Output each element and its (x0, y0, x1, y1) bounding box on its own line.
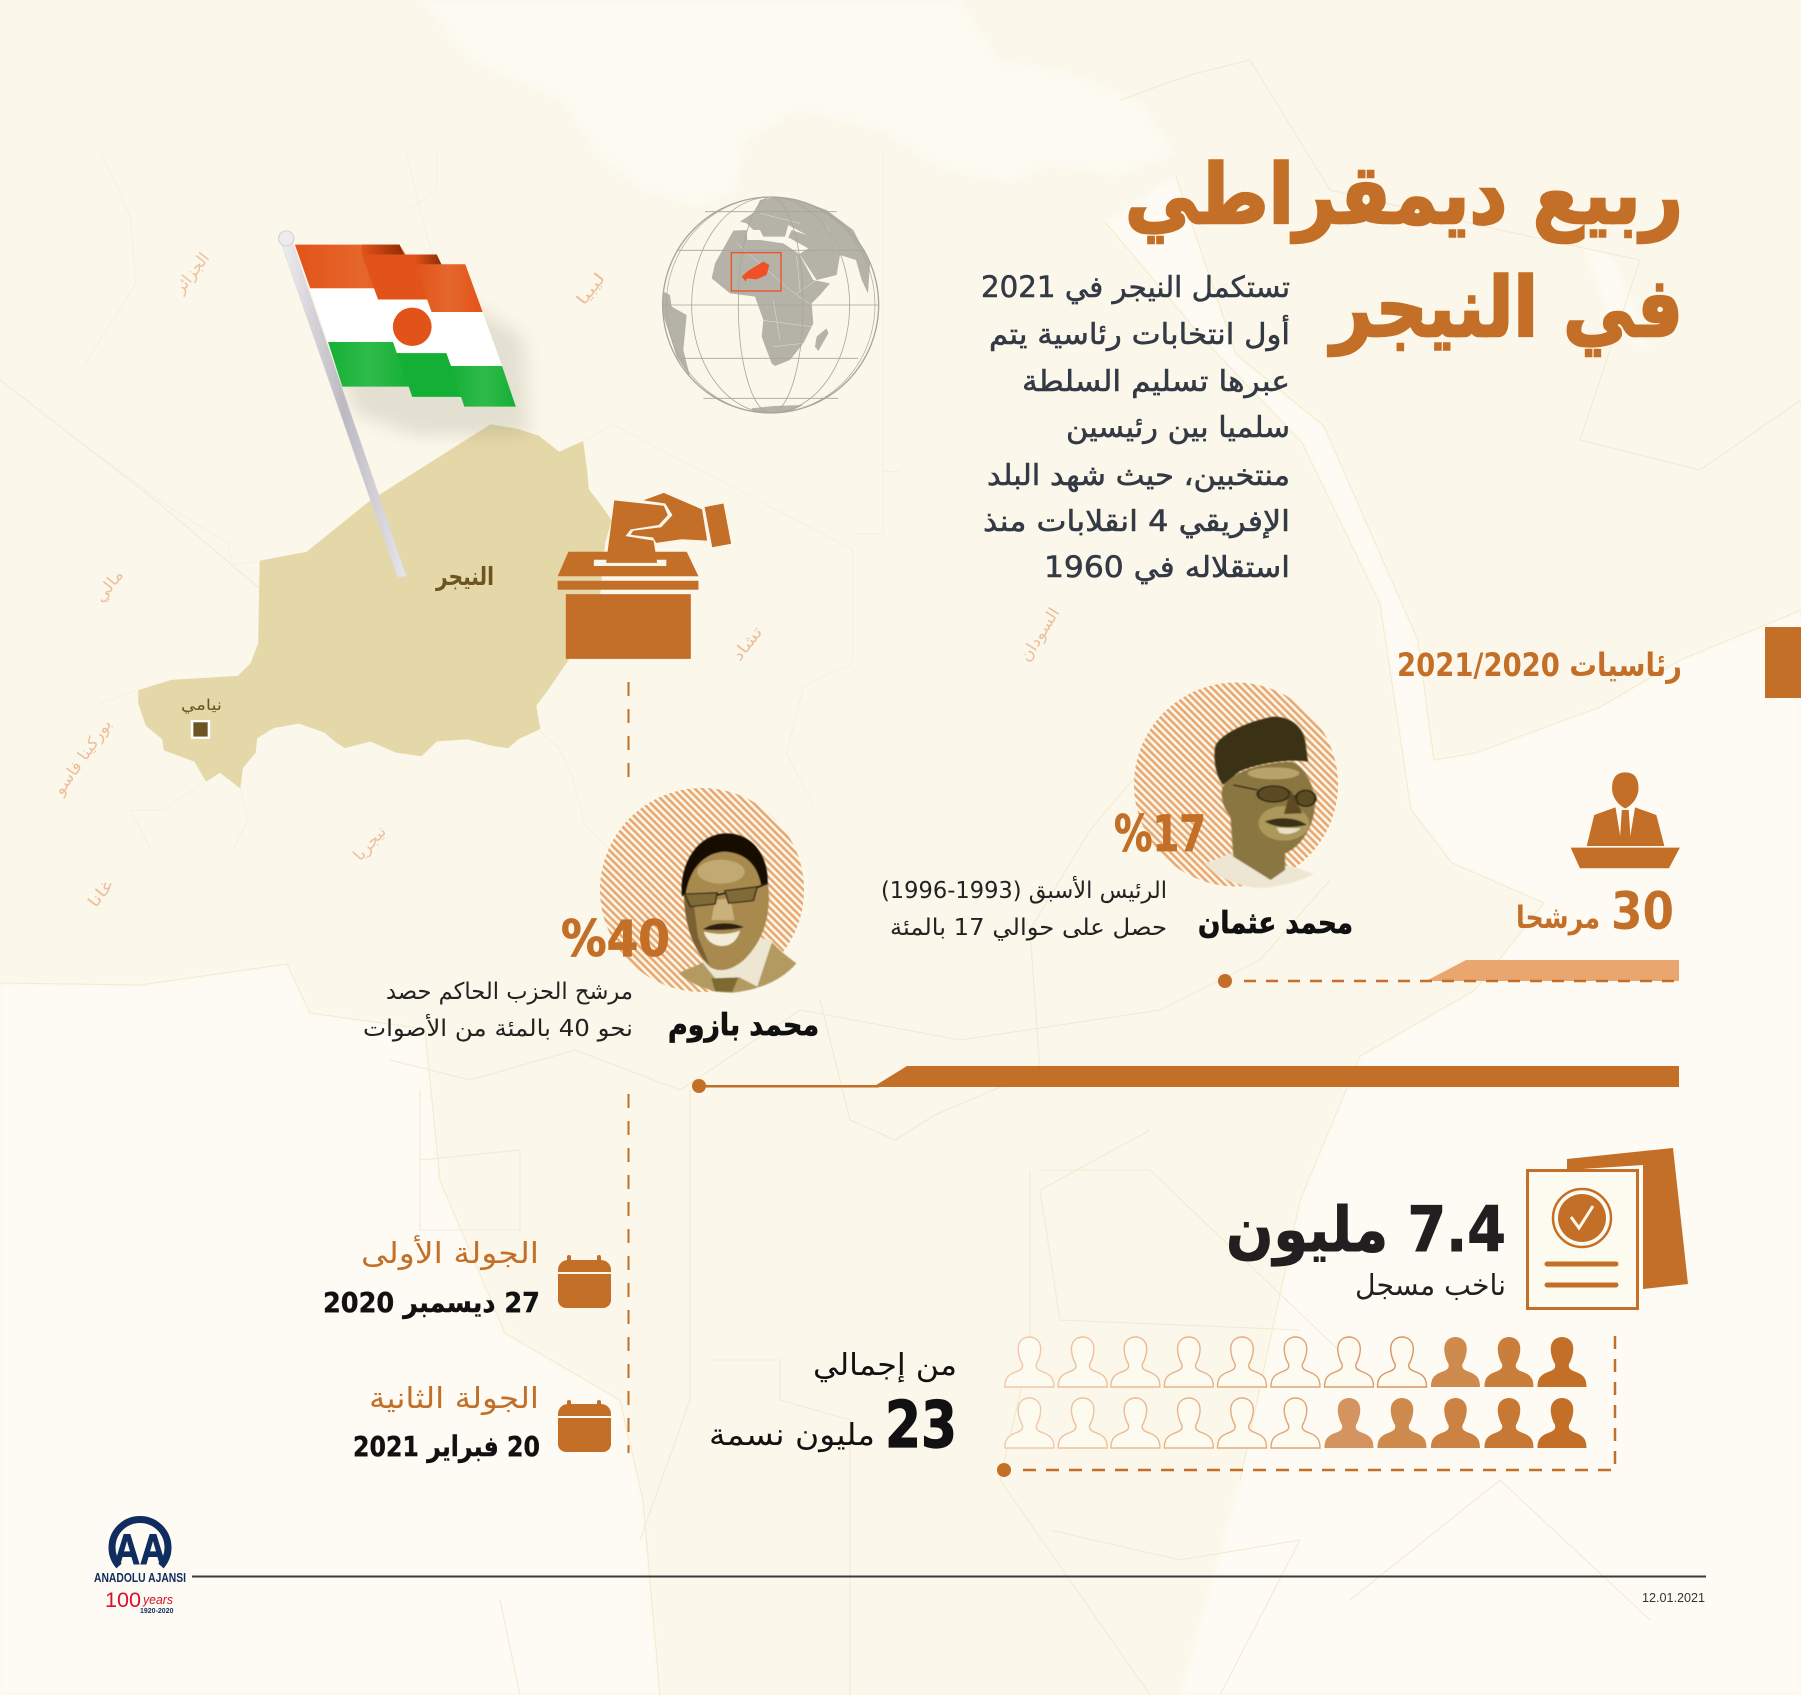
map label: Burkina Faso: بوركينا فاسو (49, 715, 116, 800)
description (363, 979, 633, 1042)
stat: of 23 million population: مليون نسمة (709, 1418, 875, 1453)
side tab (1765, 627, 1801, 698)
intro paragraph: الإفريقي 4 انقلابات منذ (983, 504, 1290, 539)
logo: Anadolu Agency: ANADOLU AJANSI (94, 1570, 186, 1585)
candidate: Bazoum (363, 788, 819, 1043)
title: في النيجر (1327, 261, 1683, 356)
people pictogram (1005, 1337, 1586, 1448)
intro paragraph: تستكمل النيجر في 2021 (981, 270, 1290, 305)
icon: calendar (558, 1255, 611, 1308)
timeline dashes (628, 682, 630, 1453)
stat: 30 candidates: 30 (1611, 882, 1674, 942)
round two (353, 1381, 611, 1463)
intro paragraph (981, 270, 1290, 585)
capital marker: Niamey (191, 720, 210, 739)
label: الجولة الثانية (369, 1381, 539, 1415)
name: محمد بازوم (668, 1008, 819, 1043)
bar: Ousmane share (1218, 960, 1679, 988)
portrait: Mohamed Bazoum (679, 833, 796, 993)
intro paragraph: استقلاله في 1960 (1044, 550, 1290, 585)
label: الجولة الأولى (361, 1234, 539, 1270)
icon: calendar (558, 1400, 611, 1452)
logo: Anadolu Agency (94, 1519, 186, 1615)
intro paragraph: أول انتخابات رئاسية يتم (989, 314, 1290, 352)
stat: 7.4 million registered voters: 7.4 مليون (1226, 1193, 1506, 1266)
logo: Anadolu Agency: AA (114, 1526, 166, 1574)
portrait: Mohamed Ousmane (1205, 717, 1316, 888)
stat: of 23 million population (709, 1348, 957, 1463)
date stamp: 12.01.2021 (1642, 1590, 1705, 1605)
footer rule (192, 1576, 1706, 1578)
percentage 40: %40 (561, 910, 670, 968)
logo: Anadolu Agency: 100 (105, 1589, 141, 1612)
stat: 7.4 million registered voters: ناخب مسجل (1355, 1268, 1506, 1302)
description: الرئيس الأسبق (1993-1996) (881, 876, 1167, 904)
description (881, 876, 1167, 941)
map label: Chad: تشاد (728, 623, 766, 664)
map label: Algeria: الجزائر (169, 249, 214, 298)
stat: 30 candidates (1516, 882, 1674, 942)
Niger map (138, 424, 612, 788)
stat: 30 candidates: مرشحا (1516, 900, 1600, 936)
map label: Sudan: السودان (1015, 604, 1064, 666)
bracket line (997, 1330, 1615, 1477)
icon: voter document (1528, 1148, 1688, 1308)
icon: globe (662, 197, 879, 413)
date: 20 فبراير 2021 (353, 1430, 540, 1463)
logo: Anadolu Agency: 1920-2020 (140, 1608, 174, 1615)
title (1125, 148, 1683, 356)
description: مرشح الحزب الحاكم حصد (386, 979, 633, 1005)
map label: Ghana: غانا (84, 876, 117, 911)
logo: Anadolu Agency: years (142, 1592, 173, 1607)
title: ربيع ديمقراطي (1125, 148, 1683, 243)
stat: 7.4 million registered voters (1226, 1193, 1506, 1302)
section heading: presidential 2020/2021: رئاسيات 2021/2020 (1397, 646, 1682, 684)
round one (323, 1234, 611, 1319)
intro paragraph: منتخبين، حيث شهد البلد (987, 458, 1290, 492)
label: Niamey: نيامي (181, 696, 222, 715)
icon: speaker at podium (1571, 772, 1680, 868)
map label: Mali: مالي (90, 566, 128, 606)
stat: of 23 million population: 23 (885, 1389, 957, 1463)
label: Niger: النيجر (434, 562, 494, 592)
map label: Nigeria: نيجريا (349, 822, 391, 865)
intro paragraph: عبرها تسليم السلطة (1022, 364, 1290, 399)
date: 27 ديسمبر 2020 (323, 1286, 540, 1319)
description: نحو 40 بالمئة من الأصوات (363, 1014, 633, 1042)
candidate: Ousmane (881, 682, 1353, 941)
icon: ballot box (558, 493, 731, 659)
description: حصل على حوالي 17 بالمئة (890, 915, 1167, 941)
stat: of 23 million population: من إجمالي (813, 1348, 957, 1383)
intro paragraph: سلميا بين رئيسين (1066, 410, 1290, 444)
percentage 17: %17 (1114, 805, 1206, 863)
icon: Niger flag on a pole (279, 231, 529, 578)
map label: Libya: ليبيا (572, 269, 609, 309)
name: محمد عثمان (1198, 906, 1353, 941)
bar: Bazoum share (692, 1066, 1679, 1093)
